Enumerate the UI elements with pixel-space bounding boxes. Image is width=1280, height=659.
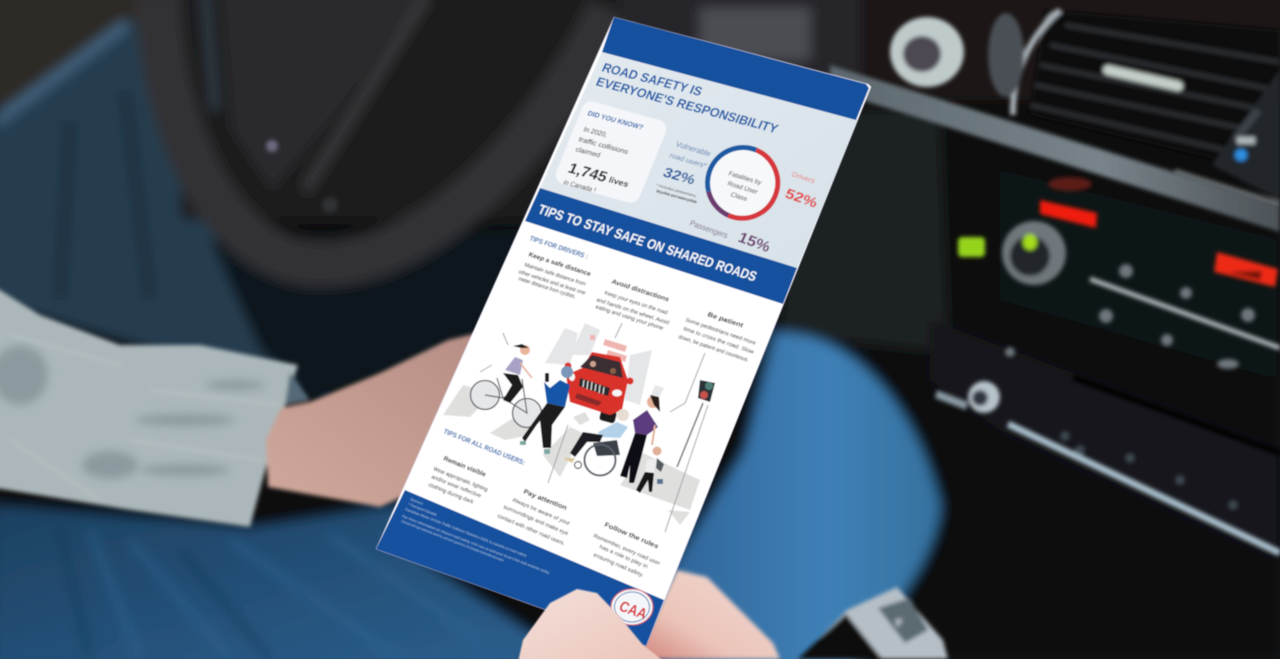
stat: vulnerable road users: bicyclists and motorcyclists (656, 188, 699, 204)
vent chrome (1013, 10, 1060, 115)
stat: passengers (688, 219, 773, 256)
logo: CAA: CAA (616, 598, 650, 623)
right finger behind card (635, 570, 780, 659)
stat: drivers: 52% (783, 185, 821, 211)
panel: did you know: DID YOU KNOW? (586, 110, 644, 132)
steering wheel area (180, 0, 620, 220)
panel: light stats background (540, 52, 858, 268)
tips for drivers (517, 235, 757, 364)
tip: be patient: time to cross the road. Slow (682, 326, 756, 356)
tip: pay attention: Always be aware of your (511, 497, 571, 527)
panel: did you know: in Canada ¹ (562, 179, 598, 194)
icon: woman with purple top (620, 395, 660, 483)
radio knob (968, 381, 1000, 413)
tip: avoid distractions: Keep your eyes on the road (603, 290, 668, 316)
tips for all road users (427, 428, 661, 579)
flyer card (376, 17, 871, 646)
tip: follow the rules (592, 521, 661, 579)
tips for drivers: TIPS FOR DRIVERS : (528, 235, 589, 261)
heading: road safety: EVERYONE'S RESPONSIBILITY (594, 74, 781, 136)
donut chart: fatalities by road user class: Class (729, 191, 749, 203)
dash knob (890, 17, 964, 87)
jeans (0, 505, 540, 659)
icon: person in wheelchair (563, 409, 629, 476)
top-left seat shadow (0, 0, 160, 110)
panel: did you know (556, 101, 666, 203)
footer references: Sources: (410, 497, 424, 506)
tip: remain visible: and/or wear reflective (430, 474, 482, 499)
stat: vulnerable road users: Vulnerable (674, 140, 713, 158)
header band (602, 17, 869, 120)
footer band (376, 490, 664, 646)
heading: road safety: ROAD SAFETY IS (600, 60, 705, 99)
stat: vulnerable road users: road users* (668, 152, 708, 170)
footer references (401, 497, 550, 575)
climate displays (1048, 177, 1092, 191)
tips for all road users: TIPS FOR ALL ROAD USERS: (442, 428, 526, 467)
stat: vulnerable road users (656, 140, 713, 204)
tip: be patient (677, 311, 757, 364)
segment: passengers 15% (709, 192, 728, 215)
background: car interior photo: P (894, 617, 905, 630)
chrome dash strip (830, 65, 1280, 232)
shirt (0, 18, 330, 400)
wheel emblem (266, 140, 278, 152)
stat: vulnerable road users: * Includes pedestrians, (656, 183, 698, 198)
donut chart: fatalities by road user class: Fatalities by (727, 170, 763, 187)
segment: vulnerable 32% (708, 147, 756, 192)
stat: drivers: Drivers (790, 171, 816, 185)
section band: tips to stay safe: TIPS TO STAY SAFE ON SHARED ROADS (536, 201, 760, 284)
tip: pay attention (496, 488, 571, 547)
chrome strips (1090, 279, 1280, 348)
tip: be patient: down, be patient and courteous. (677, 334, 750, 364)
tip: be patient: Some pedestrians need more (684, 317, 757, 347)
tip: pay attention: surroundings and make eye (502, 504, 569, 537)
tip: avoid distractions: eating and using your phone (594, 304, 664, 332)
tip: avoid distractions: Avoid distractions (610, 278, 670, 303)
icon: red car (564, 352, 634, 424)
tip: keep a safe distance: Keep a safe distance (527, 251, 592, 278)
footer references: Canadian Motor Vehicle Traffic Collision Statistics 2020, tc.canada.ca road safety (405, 507, 527, 558)
tip: follow the rules: ensuring road safety. (592, 552, 645, 579)
sweater sleeve (0, 287, 298, 527)
tip: keep a safe distance (517, 251, 592, 300)
donut chart: fatalities by road user class (708, 147, 778, 218)
vent handle (1108, 70, 1178, 86)
road crossing markings (443, 385, 700, 525)
card base and edge (376, 17, 871, 646)
holding hand thumb (518, 589, 665, 659)
tip: remain visible: Wear appropriate, lighting (432, 466, 489, 493)
panel: did you know: lives (607, 175, 631, 189)
tip: remain visible: clothing during dark (427, 482, 474, 506)
city backdrop (545, 323, 664, 405)
footer references: ¹ Transport Canada (408, 502, 437, 517)
tip: avoid distractions: and hands on the wheel. Avoid (595, 297, 670, 326)
tip: follow the rules: has a role to play in (598, 544, 648, 570)
donut chart: fatalities by road user class: Road User (726, 180, 759, 196)
sign: road ahead (590, 335, 627, 362)
gear knob (800, 587, 948, 659)
left hand (266, 330, 500, 507)
panel: did you know: 1,745 (565, 160, 610, 186)
icon: child (636, 446, 664, 493)
buttons (1005, 264, 1255, 369)
tip: avoid distractions (594, 278, 670, 332)
tip: keep a safe distance: other vehicles and at least one (517, 269, 586, 296)
tip: remain visible (427, 455, 489, 506)
tip: follow the rules: Remember, every road user (592, 533, 661, 567)
logo: CAA (611, 589, 653, 625)
right control strip (1212, 70, 1280, 200)
icon: cyclist (470, 344, 542, 428)
footer references: For more information on shared road safety visit caa.ca and your local CAA club website today (402, 514, 550, 575)
icon: traffic light (677, 380, 715, 467)
illustration: shared road scene (443, 323, 715, 532)
panel: did you know: In 2020, (582, 126, 608, 139)
tip: follow the rules: Follow the rules (603, 521, 660, 551)
vent slats (1030, 10, 1280, 175)
pointer lines (480, 323, 708, 532)
tip: be patient: Be patient (706, 311, 745, 330)
tip: pay attention: contact with other road users. (496, 513, 566, 547)
tip: pay attention: Pay attention (522, 488, 568, 512)
tip: remain visible: Remain visible (442, 455, 487, 479)
footer references: CAA and CAA logo trademarks owned by, and use is granted by, the Canadian Automobile Association (401, 519, 505, 563)
segment: drivers 52% (728, 150, 778, 218)
panel: did you know: claimed (574, 146, 601, 159)
tip: keep a safe distance: Maintain safe distance from (523, 262, 587, 288)
panel: did you know: traffic collisions (577, 136, 630, 156)
icon: pedestrian with phone (520, 366, 573, 454)
stat: passengers: 15% (735, 230, 773, 256)
stat: drivers (783, 171, 821, 211)
stat: vulnerable road users: 32% (661, 164, 699, 188)
tip: keep a safe distance: meter distance from cyclists. (517, 276, 577, 300)
stat: passengers: Passengers (688, 219, 729, 240)
